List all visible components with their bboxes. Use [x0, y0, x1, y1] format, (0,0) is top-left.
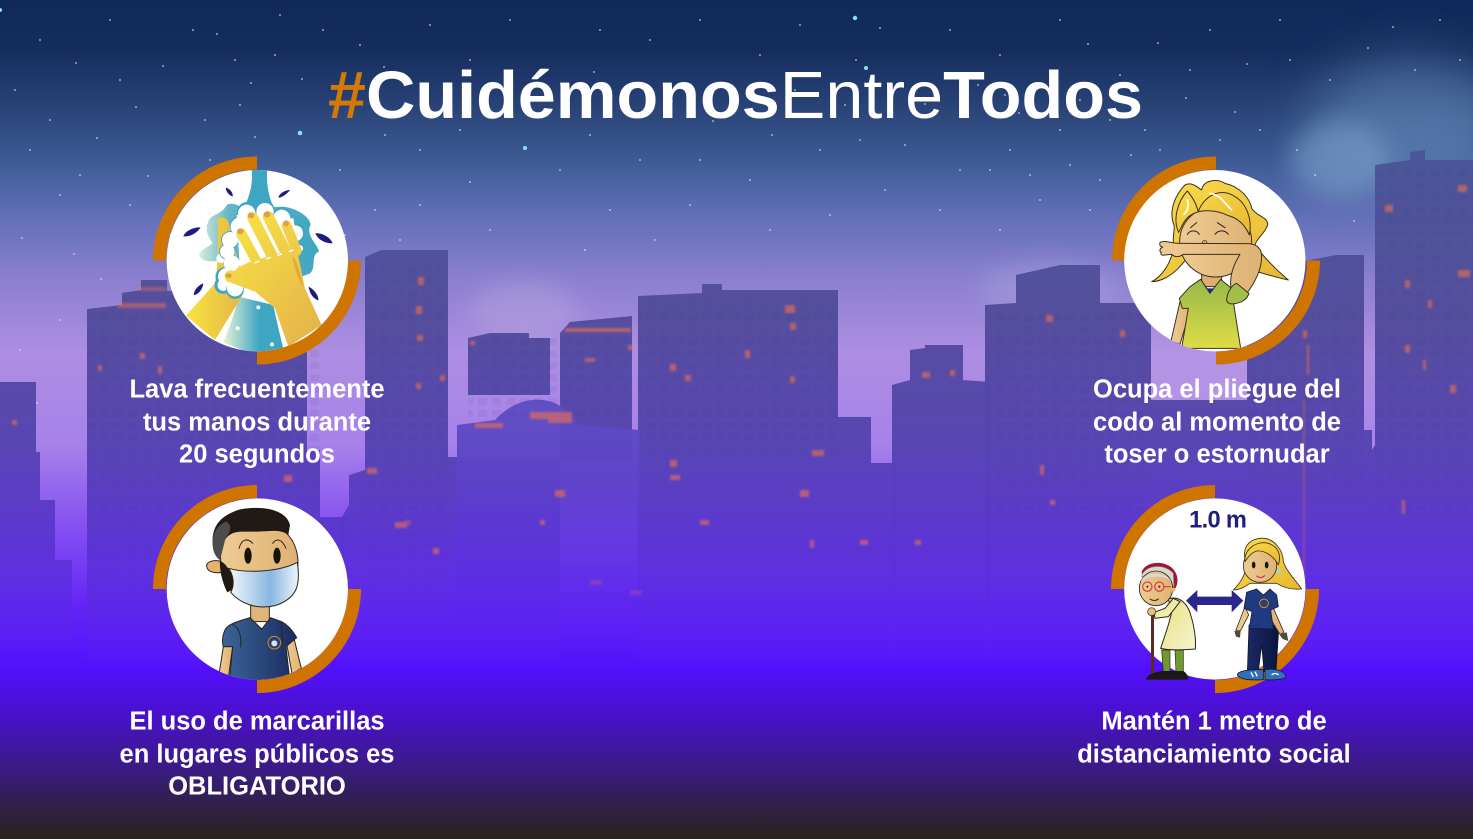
window texture [87, 165, 1473, 620]
caption: cough into elbow: codo al momento de [1093, 408, 1341, 436]
panel: face mask [120, 492, 394, 800]
icon: girl coughing into elbow [1124, 170, 1305, 351]
neck [251, 605, 269, 622]
eyes [244, 548, 252, 564]
top [1244, 589, 1278, 629]
hair [213, 508, 290, 560]
arms [1236, 607, 1284, 634]
neck [1201, 274, 1222, 288]
caption: wash hands: 20 segundos [179, 440, 335, 468]
building H [985, 265, 1247, 660]
panel: wash hands [129, 163, 385, 468]
caption: wash hands: tus manos durante [143, 408, 371, 436]
caption: face mask: El uso de marcarillas [129, 708, 385, 736]
arm across face [1160, 242, 1262, 293]
stars [15, 15, 1460, 404]
right hand [230, 217, 322, 347]
caption: face mask [120, 708, 394, 800]
icon: hands washing [167, 168, 348, 353]
caption: social distance [1077, 708, 1351, 768]
caption: social distance: distanciamiento social [1077, 740, 1351, 768]
panel: cough into elbow [1093, 163, 1341, 468]
caption: cough into elbow: toser o estornudar [1104, 440, 1330, 468]
sleeve [1227, 283, 1249, 304]
double arrow [1186, 590, 1243, 612]
caption: social distance: Mantén 1 metro de [1101, 708, 1327, 736]
shoes [1237, 669, 1286, 680]
skyline [0, 150, 1473, 660]
arms [219, 647, 233, 676]
water drops [183, 188, 333, 300]
girl in uniform [1233, 538, 1302, 680]
panel: social distance [1077, 492, 1351, 768]
building J [1372, 150, 1473, 660]
shirt [1179, 279, 1241, 348]
shirt [223, 618, 297, 682]
old lady [1139, 563, 1196, 680]
head [220, 530, 298, 576]
face [1180, 206, 1252, 277]
building E [638, 284, 895, 660]
hair back [1152, 181, 1288, 282]
hair front [1176, 191, 1250, 235]
icon: man wearing mask [167, 498, 348, 682]
icon ring: orange arcs [160, 163, 354, 358]
bright cyan stars [0, 8, 868, 150]
caption: cough into elbow: Ocupa el pliegue del [1093, 376, 1341, 404]
caption: wash hands [129, 376, 385, 468]
glowing windows [12, 185, 1470, 595]
building C [468, 333, 550, 395]
building G [892, 345, 990, 660]
icon ring: orange arcs [1118, 492, 1312, 686]
building far left [0, 382, 72, 640]
caption: wash hands: Lava frecuentemente [129, 376, 385, 404]
building A [87, 280, 345, 660]
clouds and haze [470, 60, 1473, 470]
left arm [1171, 302, 1191, 344]
legs [1247, 625, 1279, 672]
lower block [457, 400, 640, 660]
caption: face mask: en lugares públicos es [120, 740, 394, 768]
foam [216, 202, 305, 297]
caption: cough into elbow [1093, 376, 1341, 468]
logo [268, 636, 281, 649]
distance label: 1.0 m [1189, 508, 1246, 534]
caption: face mask: OBLIGATORIO [168, 772, 346, 800]
building B [340, 250, 560, 660]
icon ring: orange arcs [160, 492, 354, 686]
left hand [186, 217, 242, 340]
ear [207, 561, 222, 573]
building D [560, 316, 632, 460]
building I [1247, 255, 1372, 660]
title: #CuidémonosEntreTodos [328, 59, 1143, 133]
eyes closed [1187, 223, 1228, 234]
icon ring: orange arcs [1118, 163, 1314, 358]
mask [229, 562, 298, 607]
icon: two people one metre apart [1124, 498, 1305, 680]
